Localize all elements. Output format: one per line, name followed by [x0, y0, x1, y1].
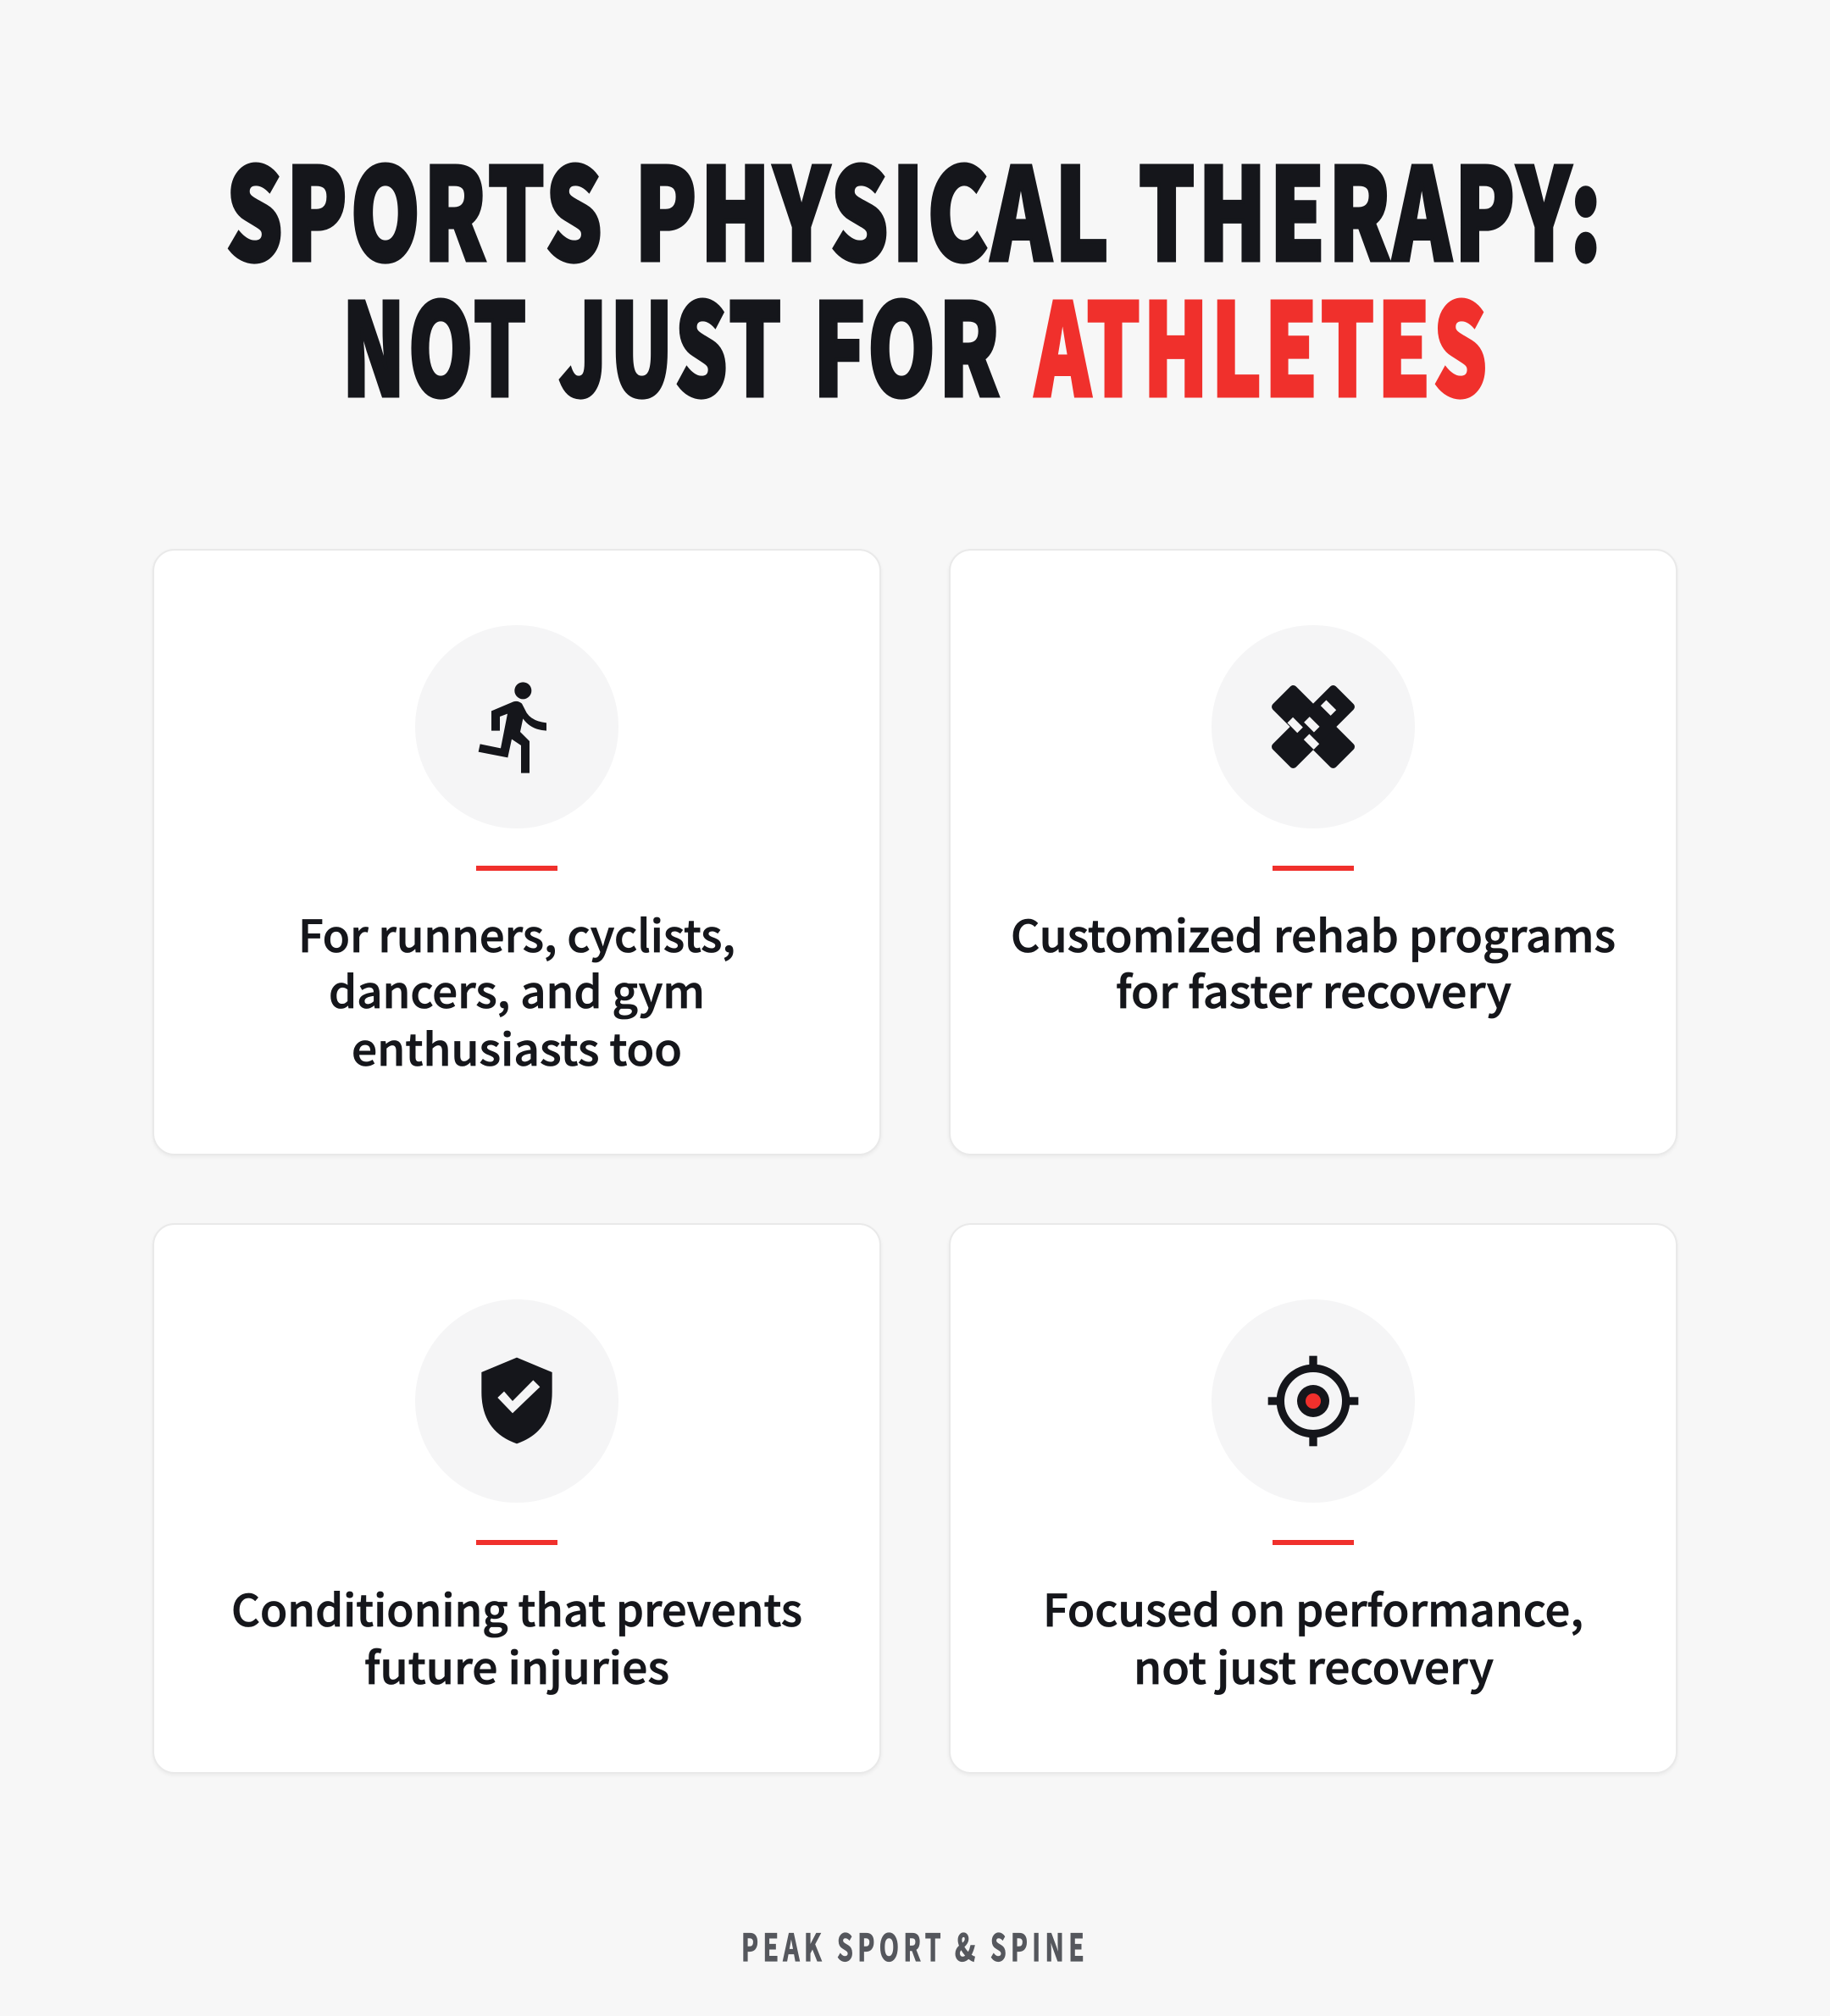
title: JUST	[559, 249, 785, 432]
icon: runner	[415, 625, 618, 828]
text: card description	[231, 1576, 802, 1697]
title: SPORTS	[226, 114, 606, 296]
panel: runners, cyclists, dancers	[152, 549, 881, 1155]
text: card description	[298, 901, 735, 1078]
text: card description: For runners, cyclists,	[298, 901, 735, 965]
panel: customized rehab	[949, 549, 1678, 1155]
title: ATHLETES	[1034, 249, 1490, 432]
text: card description: dancers, and gym	[329, 957, 705, 1021]
icon: target	[1212, 1299, 1415, 1503]
footer brand: PEAK	[741, 1918, 826, 1972]
footer brand: SPINE	[990, 1918, 1089, 1972]
title: PHYSICAL	[635, 114, 1112, 296]
text: card description: Conditioning that prevents	[231, 1576, 802, 1639]
icon: shield with check	[415, 1299, 618, 1503]
panel: performance	[949, 1223, 1678, 1774]
accent rule	[476, 866, 557, 871]
text: card description: for faster recovery	[1116, 957, 1511, 1021]
text: card description	[1011, 901, 1616, 1021]
text: card description: Focused on performance,	[1043, 1576, 1583, 1639]
footer brand: &	[955, 1918, 980, 1972]
title: THERAPY:	[1139, 114, 1605, 296]
title	[226, 114, 1605, 432]
text: card description: enthusiasts too	[352, 1015, 682, 1078]
icon: bandage	[1212, 625, 1415, 828]
panel: conditioning	[152, 1223, 881, 1774]
text: card description: Customized rehab programs	[1011, 901, 1616, 965]
text: card description: future injuries	[364, 1633, 669, 1697]
footer brand: SPORT	[837, 1918, 946, 1972]
title: FOR	[813, 249, 1003, 432]
footer brand	[741, 1918, 1089, 1972]
title: NOT	[342, 249, 530, 432]
accent rule	[476, 1540, 557, 1545]
text: card description	[1043, 1576, 1583, 1697]
accent rule	[1273, 866, 1354, 871]
text: card description: not just recovery	[1134, 1633, 1494, 1697]
accent rule	[1273, 1540, 1354, 1545]
